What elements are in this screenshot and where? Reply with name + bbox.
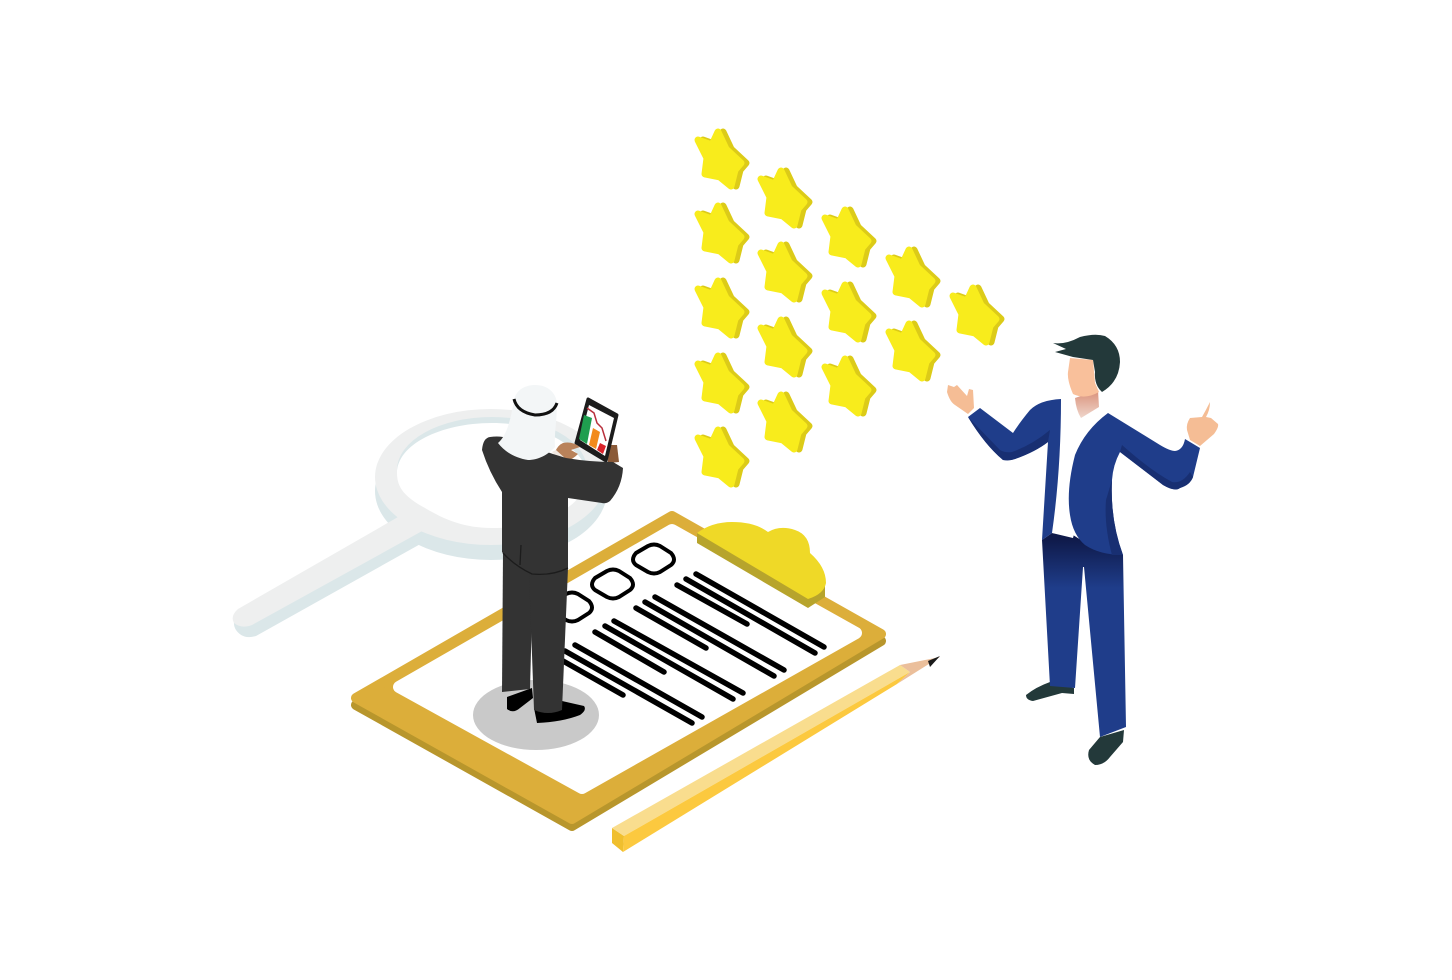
stars [698,132,1001,484]
right hand [607,445,619,463]
shoes [1026,682,1074,701]
face [1068,358,1099,397]
head band [514,399,557,415]
pencil [612,656,940,852]
checkboxes [551,544,674,622]
handle top [233,517,424,627]
jacket left shade [968,417,1050,460]
tablet [576,399,617,461]
handle side [234,528,424,637]
clipboard [356,516,881,826]
cuff [552,450,566,461]
ring top [375,409,607,545]
hair [1053,335,1120,392]
left hand [947,385,974,414]
left hand [555,442,580,460]
magnifying glass [233,409,607,637]
businessman in blue suit [947,335,1218,765]
right hand [1187,402,1218,446]
man in dark suit with tablet [482,385,623,723]
shirt [1052,399,1107,538]
trousers [502,552,533,692]
jacket left [968,399,1061,540]
clip [697,522,826,608]
neck [1075,390,1099,418]
jacket right [1069,413,1200,555]
jacket right shade [1106,445,1193,555]
ring inner wall [397,417,587,523]
text lines [556,574,824,723]
ring side [375,422,607,560]
headdress [498,385,557,460]
shoes [507,688,533,711]
jacket creases [503,545,568,574]
standing shadow [473,680,599,750]
trousers [1042,533,1126,737]
ring hole [397,423,587,528]
jacket [482,436,623,574]
